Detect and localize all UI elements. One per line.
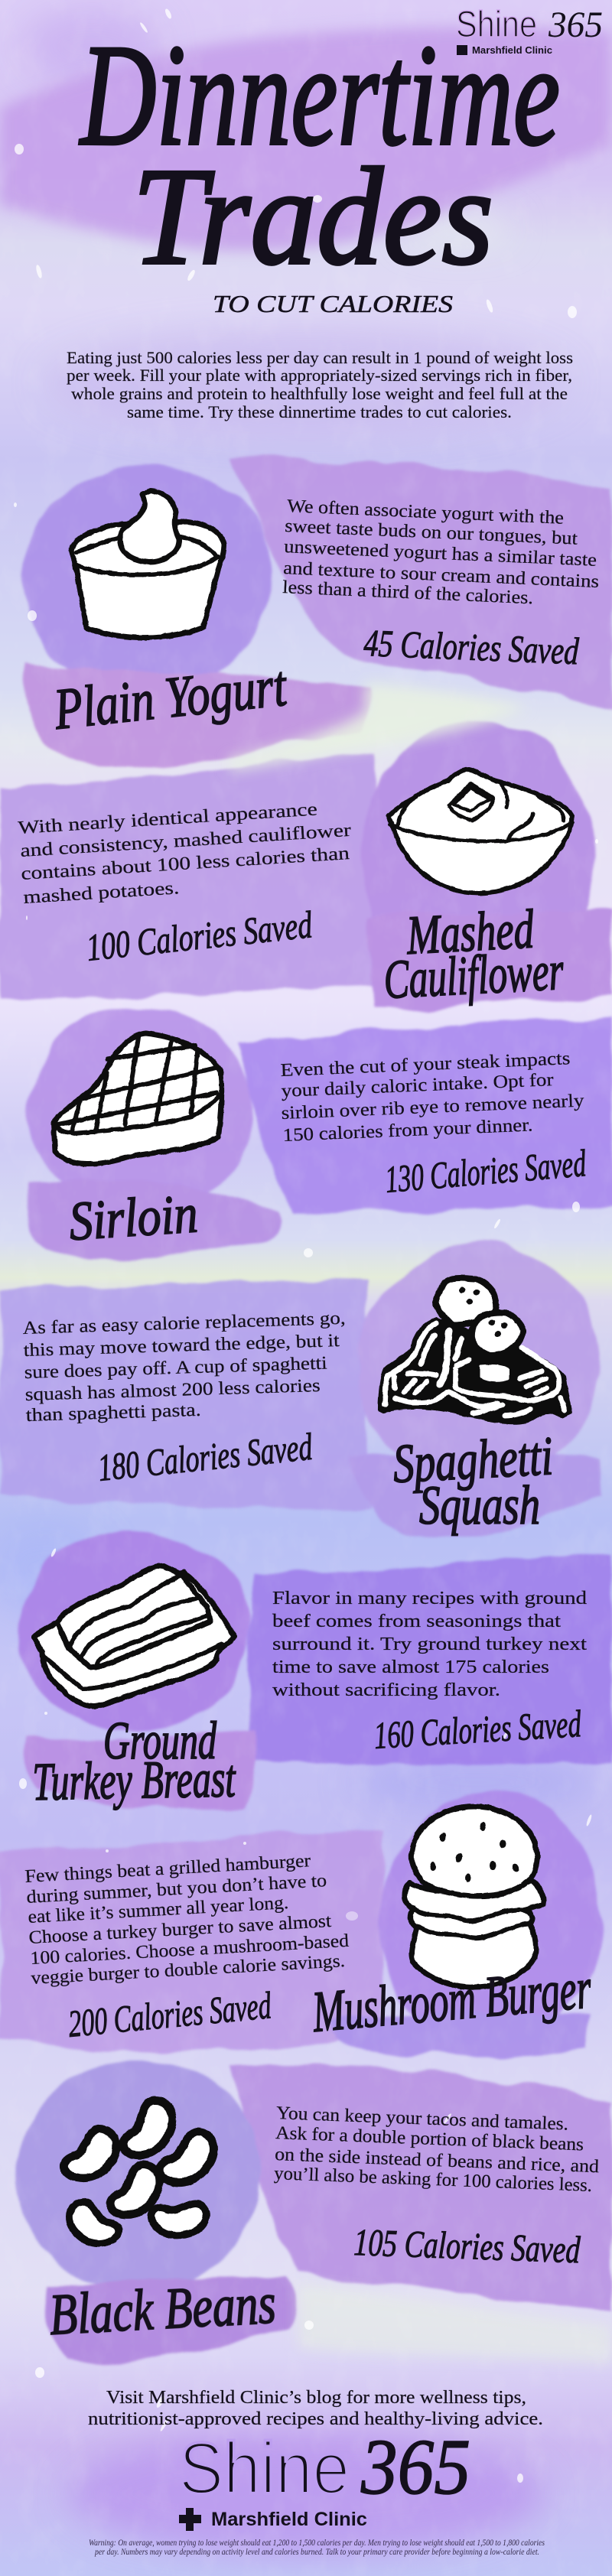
panel: mushroom burger — [24, 1807, 594, 2045]
logo: Shine365 footer: Shine — [179, 2428, 350, 2509]
description: Few things beat a grilled hamburger — [24, 1851, 311, 1887]
disclaimer — [89, 2537, 545, 2557]
name: Squash — [419, 1475, 540, 1536]
footer call to action: nutritionist-approved recipes and healthy-living advice. — [88, 2409, 543, 2429]
icon: burger — [405, 1807, 543, 1987]
intro paragraph: per week. Fill your plate with appropriately-sized servings rich in fiber, — [67, 366, 572, 385]
icon: yogurt cup — [71, 491, 224, 638]
logo: Shine365 footer: 365 — [360, 2423, 470, 2511]
description: surround it. Try ground turkey next — [272, 1634, 587, 1654]
name — [392, 1425, 555, 1536]
section 1 — [230, 459, 612, 710]
description: contains about 100 less calories than — [21, 844, 350, 884]
subtitle: TO CUT CALORIES — [213, 290, 453, 317]
description — [22, 1309, 346, 1426]
intro paragraph: same time. Try these dinnertime trades to cut calories. — [127, 402, 512, 421]
description — [272, 1589, 587, 1700]
section 6 — [0, 1831, 382, 2053]
panel: plain yogurt — [50, 491, 599, 742]
description: less than a third of the calories. — [282, 577, 534, 608]
logo: Shine365 top: Marshfield Clinic — [472, 44, 552, 56]
panel: spaghetti squash — [22, 1278, 572, 1536]
intro paragraph — [67, 348, 573, 421]
description: and consistency, mashed cauliflower — [20, 821, 352, 861]
name: Mashed — [405, 898, 536, 966]
description: without sacrificing flavor. — [272, 1680, 500, 1700]
description: this may move toward the edge, but it — [23, 1331, 340, 1361]
top band — [0, 28, 612, 251]
description: beef comes from seasonings that — [272, 1612, 561, 1631]
calories saved: 180 Calories Saved — [96, 1425, 314, 1489]
section 3 — [242, 1016, 612, 1215]
description — [280, 1049, 584, 1146]
description: and texture to sour cream and contains — [283, 558, 599, 592]
footer call to action — [88, 2388, 543, 2429]
description — [282, 496, 599, 608]
section 2 — [0, 753, 375, 1000]
description: Choose a turkey burger to save almost — [28, 1911, 332, 1948]
description: sirloin over rib eye to remove nearly — [281, 1091, 584, 1124]
description: you’ll also be asking for 100 calories less. — [274, 2164, 592, 2196]
description: 100 calories. Choose a mushroom-based — [30, 1931, 350, 1969]
description: We often associate yogurt with the — [287, 496, 565, 529]
section 4 — [0, 1281, 367, 1508]
description: 150 calories from your dinner. — [282, 1115, 533, 1146]
logo: Shine365 top: Shine — [456, 5, 537, 45]
icon: bowl of mash — [389, 769, 572, 893]
description: You can keep your tacos and tamales. — [276, 2103, 568, 2135]
description: time to save almost 175 calories — [272, 1657, 549, 1677]
icon: packaged ground turkey — [34, 1566, 234, 1706]
logo: Shine365 top — [456, 5, 603, 56]
description — [18, 799, 352, 908]
name: Plain Yogurt — [50, 653, 291, 742]
description: your daily caloric intake. Opt for — [281, 1070, 554, 1101]
footer call to action: Visit Marshfield Clinic’s blog for more wellness tips, — [106, 2388, 526, 2408]
description: eat like it’s summer all year long. — [28, 1893, 289, 1927]
logo: Shine365 top: 365 — [548, 5, 603, 45]
calories saved: 100 Calories Saved — [84, 903, 314, 969]
panel: sirloin — [54, 1033, 588, 1252]
description: on the side instead of beans and rice, and — [275, 2145, 599, 2177]
description: sure does pay off. A cup of spaghetti — [24, 1354, 327, 1383]
name: Spaghetti — [392, 1425, 555, 1495]
description: squash has almost 200 less calories — [24, 1376, 321, 1405]
name — [32, 1712, 236, 1812]
title: Dinnertime Trades: Trades — [132, 140, 493, 294]
icon: beans — [61, 2095, 220, 2254]
description: than spaghetti pasta. — [25, 1400, 201, 1426]
calories saved: 200 Calories Saved — [67, 1983, 274, 2045]
panel: black beans — [47, 2095, 599, 2347]
icon: spaghetti and meatballs — [378, 1278, 572, 1424]
description: Ask for a double portion of black beans — [275, 2123, 584, 2155]
intro paragraph: Eating just 500 calories less per day can result in 1 pound of weight loss — [67, 348, 573, 367]
description: With nearly identical appearance — [18, 799, 318, 838]
description: Flavor in many recipes with ground — [272, 1589, 587, 1608]
name: Sirloin — [67, 1182, 200, 1252]
description: Even the cut of your steak impacts — [280, 1049, 571, 1081]
name: Black Beans — [47, 2272, 277, 2347]
description: sweet taste buds on our tongues, but — [285, 516, 578, 549]
description: unsweetened yogurt has a similar taste — [284, 537, 597, 571]
description: As far as easy calorie replacements go, — [22, 1309, 346, 1338]
title: Dinnertime Trades — [79, 15, 560, 294]
description — [24, 1851, 350, 1989]
panel: ground turkey breast — [32, 1566, 587, 1812]
panel: mashed cauliflower — [18, 769, 572, 1010]
name — [382, 898, 565, 1010]
description: mashed potatoes. — [23, 878, 180, 908]
logo: Marshfield Clinic: Marshfield Clinic — [211, 2509, 367, 2530]
name: Turkey Breast — [32, 1749, 236, 1812]
section 7 — [230, 2064, 612, 2316]
section 5 — [250, 1553, 612, 1765]
icon: steak — [54, 1033, 222, 1164]
description: veggie burger to double calorie savings. — [31, 1951, 346, 1989]
logo: Shine365 footer — [179, 2423, 470, 2511]
description — [274, 2103, 599, 2196]
intro paragraph: whole grains and protein to healthfully lose weight and feel full at the — [71, 384, 568, 403]
description: during summer, but you don’t have to — [26, 1871, 327, 1908]
name: Ground — [103, 1712, 217, 1771]
